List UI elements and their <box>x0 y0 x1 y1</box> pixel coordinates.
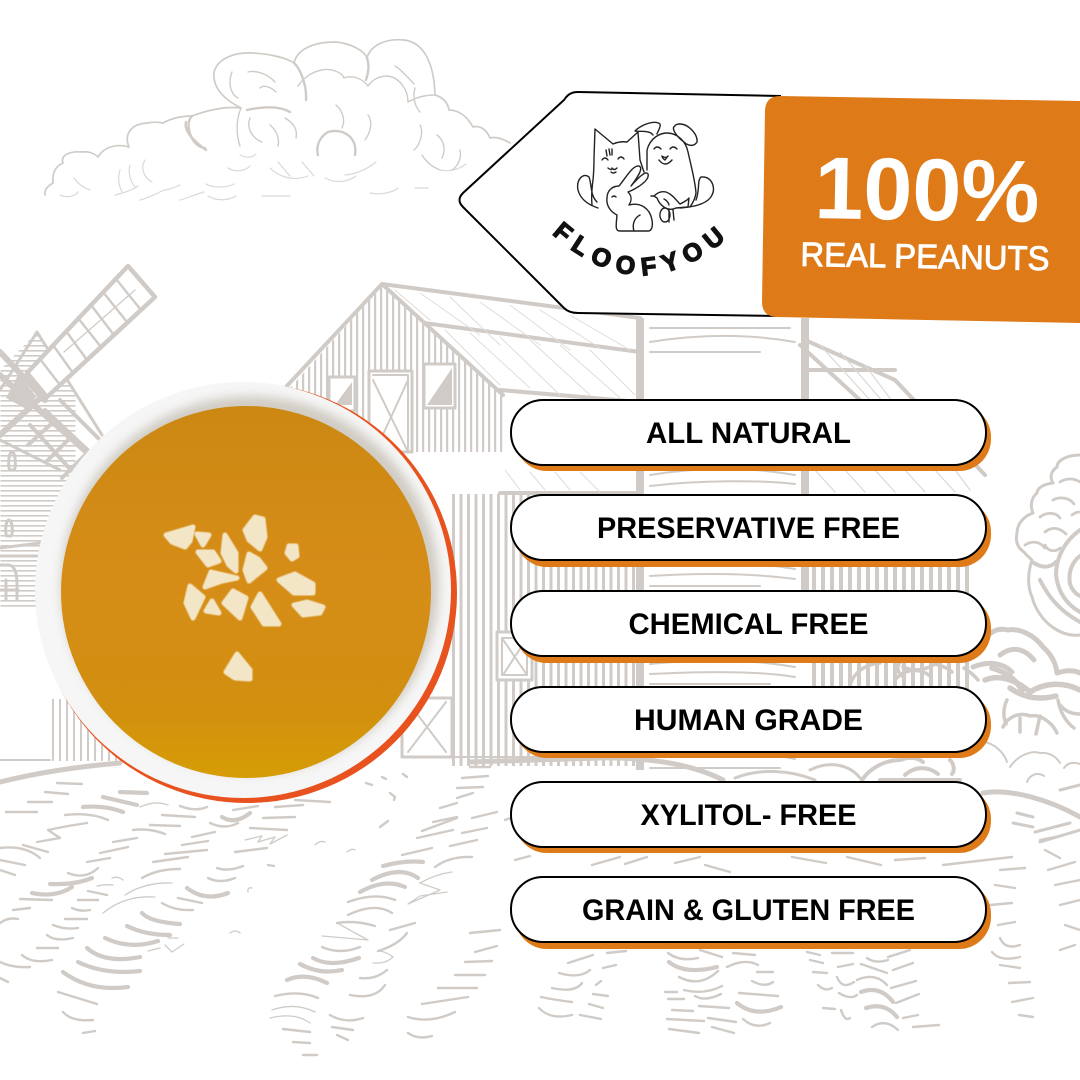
icon: rabbit <box>607 166 652 231</box>
windmill sketch <box>0 266 155 610</box>
barn roof lines <box>285 284 640 493</box>
barn wall hatching <box>452 494 638 766</box>
tag outline <box>460 92 780 316</box>
windmill windows and door <box>0 452 18 600</box>
orange badge: 100% real peanuts <box>762 96 1080 323</box>
cloud sketch <box>45 40 510 200</box>
peanut butter surface <box>61 406 431 778</box>
benefit pill: xylitol free: XYLITOL- FREE <box>640 799 856 832</box>
field strokes, thin <box>97 803 452 1023</box>
benefit pill: xylitol free <box>511 782 991 853</box>
benefit pill: all natural <box>511 400 991 471</box>
peanut pieces <box>166 517 323 679</box>
benefit pill: chemical free: CHEMICAL FREE <box>628 608 868 641</box>
benefit pill: human grade <box>511 687 991 758</box>
bowl orange outer rim <box>37 383 457 803</box>
badge background <box>762 96 1080 323</box>
field strokes <box>0 767 1080 1055</box>
logo tag: arrow-shaped sign <box>458 91 781 317</box>
windmill other blades and hub <box>0 352 105 480</box>
benefit pill: human grade: HUMAN GRADE <box>634 704 863 737</box>
benefit pill: grain and gluten free <box>511 877 991 949</box>
icon: dog <box>635 122 714 208</box>
field strokes, thick <box>32 792 897 1017</box>
benefit pill: preservative free: PRESERVATIVE FREE <box>597 512 900 545</box>
benefit pill: grain and gluten free: GRAIN & GLUTEN FREE <box>582 894 915 927</box>
brand name: FLOOFYOU <box>552 220 724 276</box>
badge number: 100% <box>814 138 1040 241</box>
tree <box>1016 455 1080 635</box>
right barn roof <box>800 340 985 492</box>
benefit pill: chemical free <box>511 591 991 663</box>
right barn wall hatching <box>812 560 972 690</box>
barn sketch <box>0 284 985 770</box>
bush <box>850 629 1080 782</box>
icon: cat <box>578 129 644 208</box>
benefit pill: all natural: ALL NATURAL <box>646 417 851 450</box>
left lower barn wall hatching <box>52 699 125 761</box>
field strokes, medium <box>0 774 407 1033</box>
barn gable hatching <box>290 285 505 455</box>
bowl of peanut butter <box>35 382 457 803</box>
silo <box>640 318 805 770</box>
windmill tower hatching <box>0 330 76 610</box>
bowl white rim <box>35 382 451 798</box>
icon: bird <box>651 192 689 222</box>
tree and bushes sketch <box>850 455 1080 782</box>
lower barn doors <box>0 632 640 760</box>
ground lines <box>0 758 1080 842</box>
windmill upper blade <box>27 266 155 397</box>
benefit pill: preservative free <box>511 495 991 567</box>
barn windows and door <box>329 364 455 452</box>
rim inner shadow <box>61 396 439 774</box>
badge caption: REAL PEANUTS <box>800 236 1050 278</box>
